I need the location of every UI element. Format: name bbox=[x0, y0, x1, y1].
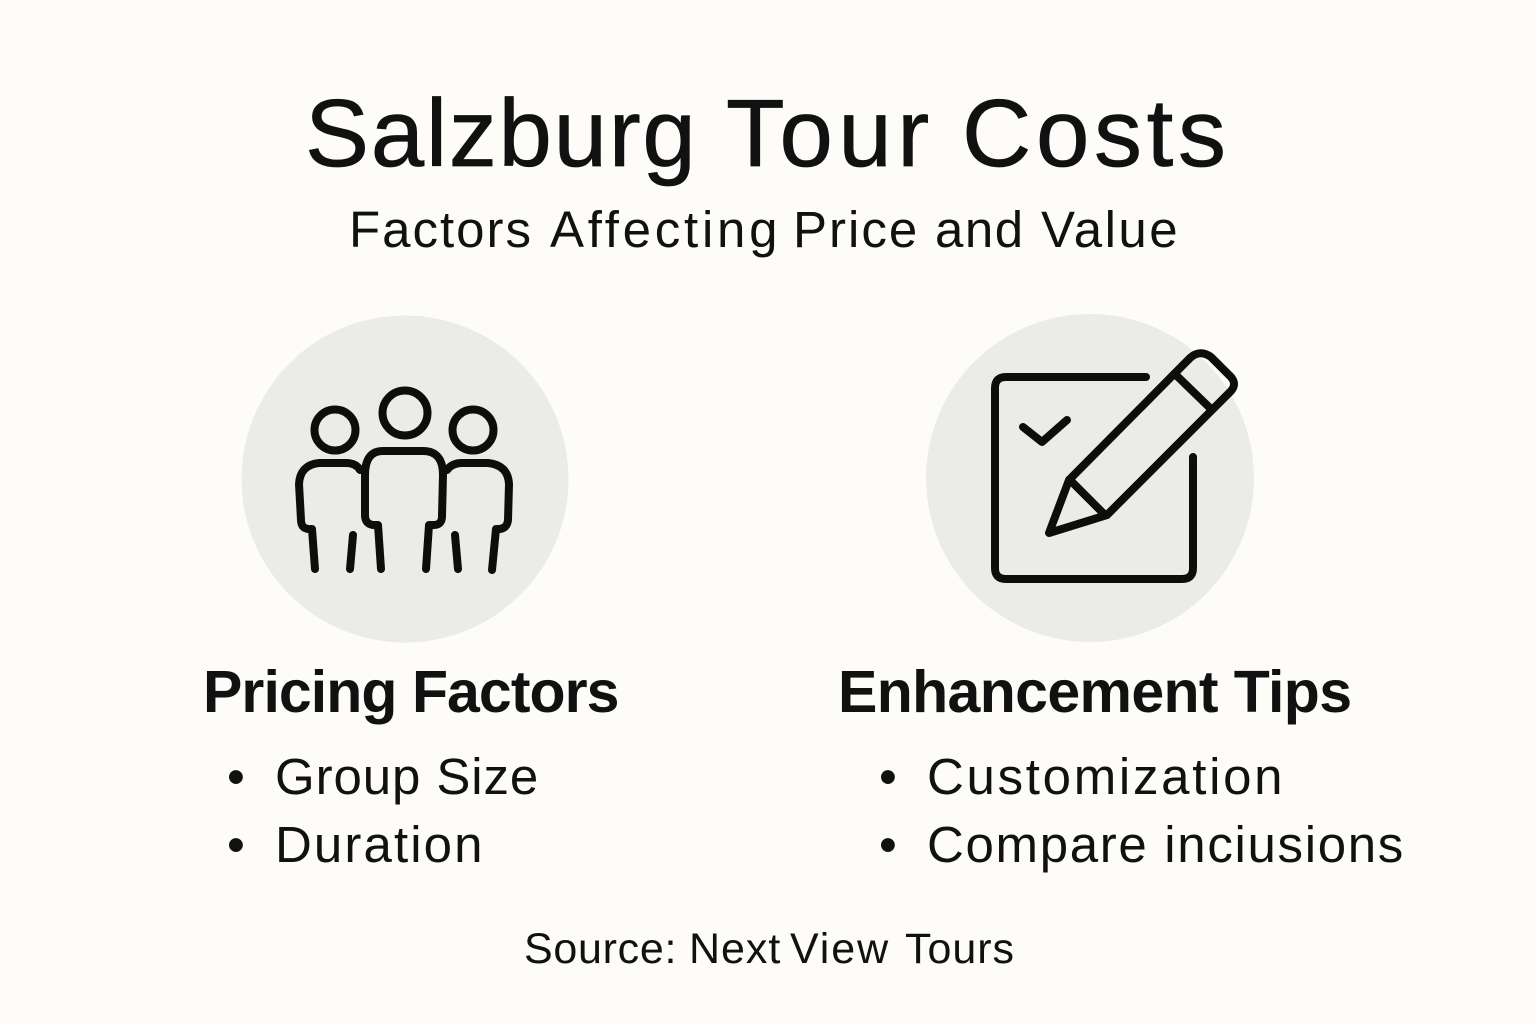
list: enhancement tips: Customization bbox=[927, 748, 1285, 805]
source: View bbox=[790, 925, 890, 973]
title bbox=[305, 80, 1231, 187]
source: Tours bbox=[905, 925, 1015, 973]
subtitle: and bbox=[935, 201, 1025, 258]
subtitle: Value bbox=[1041, 201, 1180, 258]
subtitle: Price bbox=[793, 201, 919, 258]
list: pricing factors: • bbox=[227, 816, 245, 873]
source: Next bbox=[689, 925, 781, 973]
list: pricing factors: • bbox=[227, 748, 245, 805]
subtitle bbox=[349, 201, 1180, 258]
source: Source: bbox=[524, 925, 677, 973]
list: pricing factors: Duration bbox=[275, 816, 485, 873]
list: enhancement tips: • bbox=[879, 816, 897, 873]
list: enhancement tips: • bbox=[879, 748, 897, 805]
list: enhancement tips: Compare inciusions bbox=[927, 816, 1405, 873]
subtitle: Factors bbox=[349, 201, 533, 258]
icon: checklist with pencil bbox=[926, 314, 1254, 642]
icon: group of people bbox=[242, 316, 568, 642]
heading: pricing factors: Pricing Factors bbox=[203, 659, 619, 725]
heading: enhancement tips: Enhancement Tips bbox=[838, 659, 1351, 725]
title: Salzburg bbox=[305, 80, 698, 187]
title: Tour bbox=[726, 80, 935, 187]
title: Costs bbox=[962, 80, 1231, 187]
subtitle: Affecting bbox=[550, 201, 781, 258]
list: pricing factors bbox=[227, 748, 539, 873]
source bbox=[524, 925, 1015, 973]
list: pricing factors: Group Size bbox=[275, 748, 539, 805]
list: enhancement tips bbox=[879, 748, 1405, 873]
